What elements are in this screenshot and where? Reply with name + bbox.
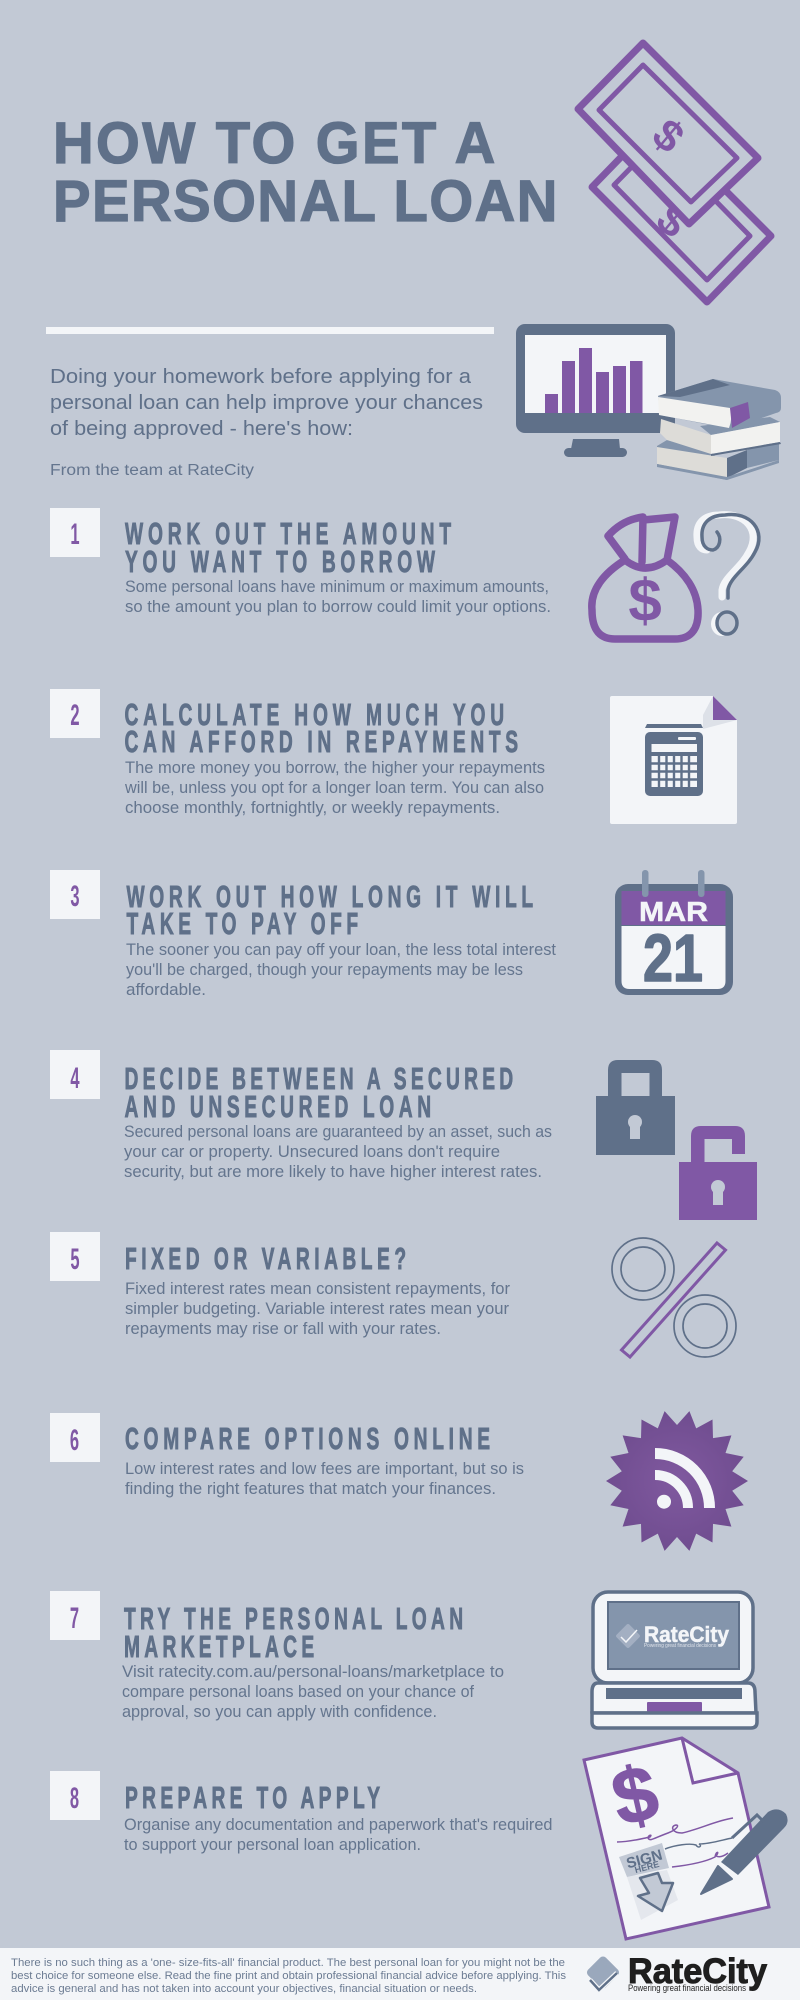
- body 1: so the amount you plan to borrow could limit your options.: [125, 598, 551, 616]
- icon: banknotes: $: [647, 195, 697, 248]
- heading 2: CAN AFFORD IN REPAYMENTS: [124, 726, 518, 759]
- body 1: Some personal loans have minimum or maximum amounts,: [125, 578, 549, 596]
- body 3: [126, 941, 556, 999]
- body 8: Organise any documentation and paperwork that's required: [124, 1816, 552, 1834]
- body 3: you'll be charged, though your repayments may be less: [126, 961, 523, 979]
- icon: calendar: 21: [643, 921, 703, 996]
- step 2: [50, 689, 545, 817]
- heading 1: WORK OUT THE AMOUNT: [125, 518, 451, 551]
- heading 5: FIXED OR VARIABLE?: [125, 1243, 406, 1276]
- body 7: approval, so you can apply with confidence.: [122, 1703, 437, 1721]
- intro text: of being approved - here's how:: [50, 417, 353, 440]
- icon: RSS starburst: [606, 1411, 748, 1551]
- body 6: Low interest rates and low fees are important, but so is: [125, 1460, 524, 1478]
- step 4: [50, 1050, 552, 1181]
- body 4: security, but are more likely to have higher interest rates.: [124, 1163, 542, 1181]
- number badge 4: 4: [70, 1062, 80, 1095]
- disclaimer text: There is no such thing as a 'one- size-fits-all' financial product. The best personal loan for you might not be the: [11, 1957, 565, 1969]
- footer band: [0, 1948, 800, 2000]
- body 8: to support your personal loan application.: [124, 1836, 421, 1854]
- body 5: repayments may rise or fall with your rates.: [125, 1320, 441, 1338]
- body 1: [125, 578, 551, 616]
- body 2: The more money you borrow, the higher your repayments: [125, 759, 545, 777]
- icon: laptop: Powering great financial decisions: [644, 1643, 716, 1649]
- icon: percent sign: [612, 1238, 736, 1357]
- number badge 5: 5: [70, 1243, 80, 1276]
- body 7: [122, 1663, 504, 1721]
- body 3: The sooner you can pay off your loan, the less total interest: [126, 941, 556, 959]
- step 5: [50, 1232, 511, 1338]
- step 6: [50, 1413, 524, 1498]
- icon: signed document with pen: $: [604, 1747, 666, 1843]
- heading 3: TAKE TO PAY OFF: [126, 908, 358, 941]
- step 3: [50, 870, 556, 999]
- icon: stack of books: [657, 379, 781, 480]
- number badge 1: [50, 508, 100, 557]
- body 3: affordable.: [126, 981, 206, 999]
- intro text: Doing your homework before applying for a: [50, 365, 472, 388]
- RateCity logo: RateCity: [628, 1952, 768, 1991]
- number badge 3: [50, 870, 100, 919]
- number badge 4: [50, 1050, 100, 1099]
- step 7: [50, 1591, 504, 1721]
- body 2: will be, unless you opt for a longer loan term. You can also: [124, 779, 544, 797]
- icon: money bag and question mark: [592, 514, 759, 639]
- heading 7: TRY THE PERSONAL LOAN: [124, 1603, 463, 1636]
- title: PERSONAL LOAN: [53, 169, 557, 234]
- number badge 7: 7: [70, 1602, 79, 1635]
- body 7: Visit ratecity.com.au/personal-loans/marketplace to: [122, 1663, 504, 1681]
- number badge 2: [50, 689, 100, 738]
- number badge 8: [50, 1771, 100, 1820]
- icon: signed document with pen: SIGN: [624, 1846, 664, 1872]
- number badge 5: [50, 1232, 100, 1281]
- icon: closed and open padlocks: [596, 1060, 757, 1220]
- disclaimer text: best choice for someone else. Read the fine print and obtain professional financial advice before applying. This: [11, 1970, 567, 1982]
- disclaimer text: advice is general and has not taken into account your objectives, financial situation or needs.: [11, 1983, 477, 1995]
- body 6: [125, 1460, 524, 1498]
- body 2: choose monthly, fortnightly, or weekly repayments.: [125, 799, 500, 817]
- heading 1: YOU WANT TO BORROW: [125, 546, 435, 579]
- body 4: your car or property. Unsecured loans don't require: [124, 1143, 500, 1161]
- body 6: finding the right features that match your finances.: [125, 1480, 496, 1498]
- heading 4: [124, 1063, 513, 1124]
- heading 3: WORK OUT HOW LONG IT WILL: [126, 881, 533, 914]
- number badge 8: 8: [70, 1782, 79, 1815]
- title: HOW TO GET A: [53, 111, 495, 176]
- number badge 1: 1: [70, 518, 80, 551]
- icon: signed document with pen: [584, 1738, 788, 1939]
- icon: laptop: RateCity: [644, 1622, 730, 1647]
- body 5: [125, 1280, 511, 1338]
- number badge 3: 3: [70, 880, 80, 913]
- body 4: Secured personal loans are guaranteed by an asset, such as: [124, 1123, 552, 1141]
- body 5: Fixed interest rates mean consistent repayments, for: [125, 1280, 511, 1298]
- body 4: [124, 1123, 552, 1181]
- icon: banknotes: [578, 43, 771, 302]
- icon: laptop: [592, 1592, 757, 1728]
- body 8: [124, 1816, 552, 1854]
- heading 8: PREPARE TO APPLY: [125, 1782, 380, 1815]
- icon: calendar: MAR: [639, 896, 708, 927]
- number badge 6: 6: [70, 1424, 79, 1457]
- heading 2: CALCULATE HOW MUCH YOU: [124, 699, 504, 732]
- attribution: From the team at RateCity: [50, 462, 254, 479]
- icon: calendar: [615, 870, 733, 996]
- step 1: [50, 508, 551, 616]
- heading 1: [125, 518, 451, 579]
- heading 4: AND UNSECURED LOAN: [124, 1091, 431, 1124]
- heading 7: [124, 1603, 463, 1664]
- heading 7: MARKETPLACE: [124, 1631, 314, 1664]
- icon: monitor with bar chart: [516, 324, 675, 457]
- body 5: simpler budgeting. Variable interest rates mean your: [125, 1300, 510, 1318]
- step 8: [50, 1771, 552, 1854]
- number badge 2: 2: [70, 699, 80, 732]
- heading 4: DECIDE BETWEEN A SECURED: [124, 1063, 513, 1096]
- divider bar: [46, 327, 494, 334]
- number badge 7: [50, 1591, 100, 1640]
- body 7: compare personal loans based on your chance of: [122, 1683, 474, 1701]
- icon: signed document with pen: HERE: [634, 1859, 660, 1875]
- heading 6: COMPARE OPTIONS ONLINE: [125, 1423, 490, 1456]
- heading 2: [124, 699, 518, 759]
- icon: calculator document: [610, 696, 737, 824]
- icon: banknotes: $: [643, 110, 693, 163]
- number badge 6: [50, 1413, 100, 1462]
- RateCity logo: Powering great financial decisions: [628, 1983, 746, 1994]
- intro text: [50, 365, 483, 440]
- body 2: [124, 759, 545, 817]
- heading 3: [126, 881, 533, 941]
- intro text: personal loan can help improve your chances: [50, 391, 483, 414]
- icon: money bag and question mark: $: [628, 567, 662, 634]
- disclaimer text: [11, 1957, 567, 1995]
- title: [53, 111, 557, 234]
